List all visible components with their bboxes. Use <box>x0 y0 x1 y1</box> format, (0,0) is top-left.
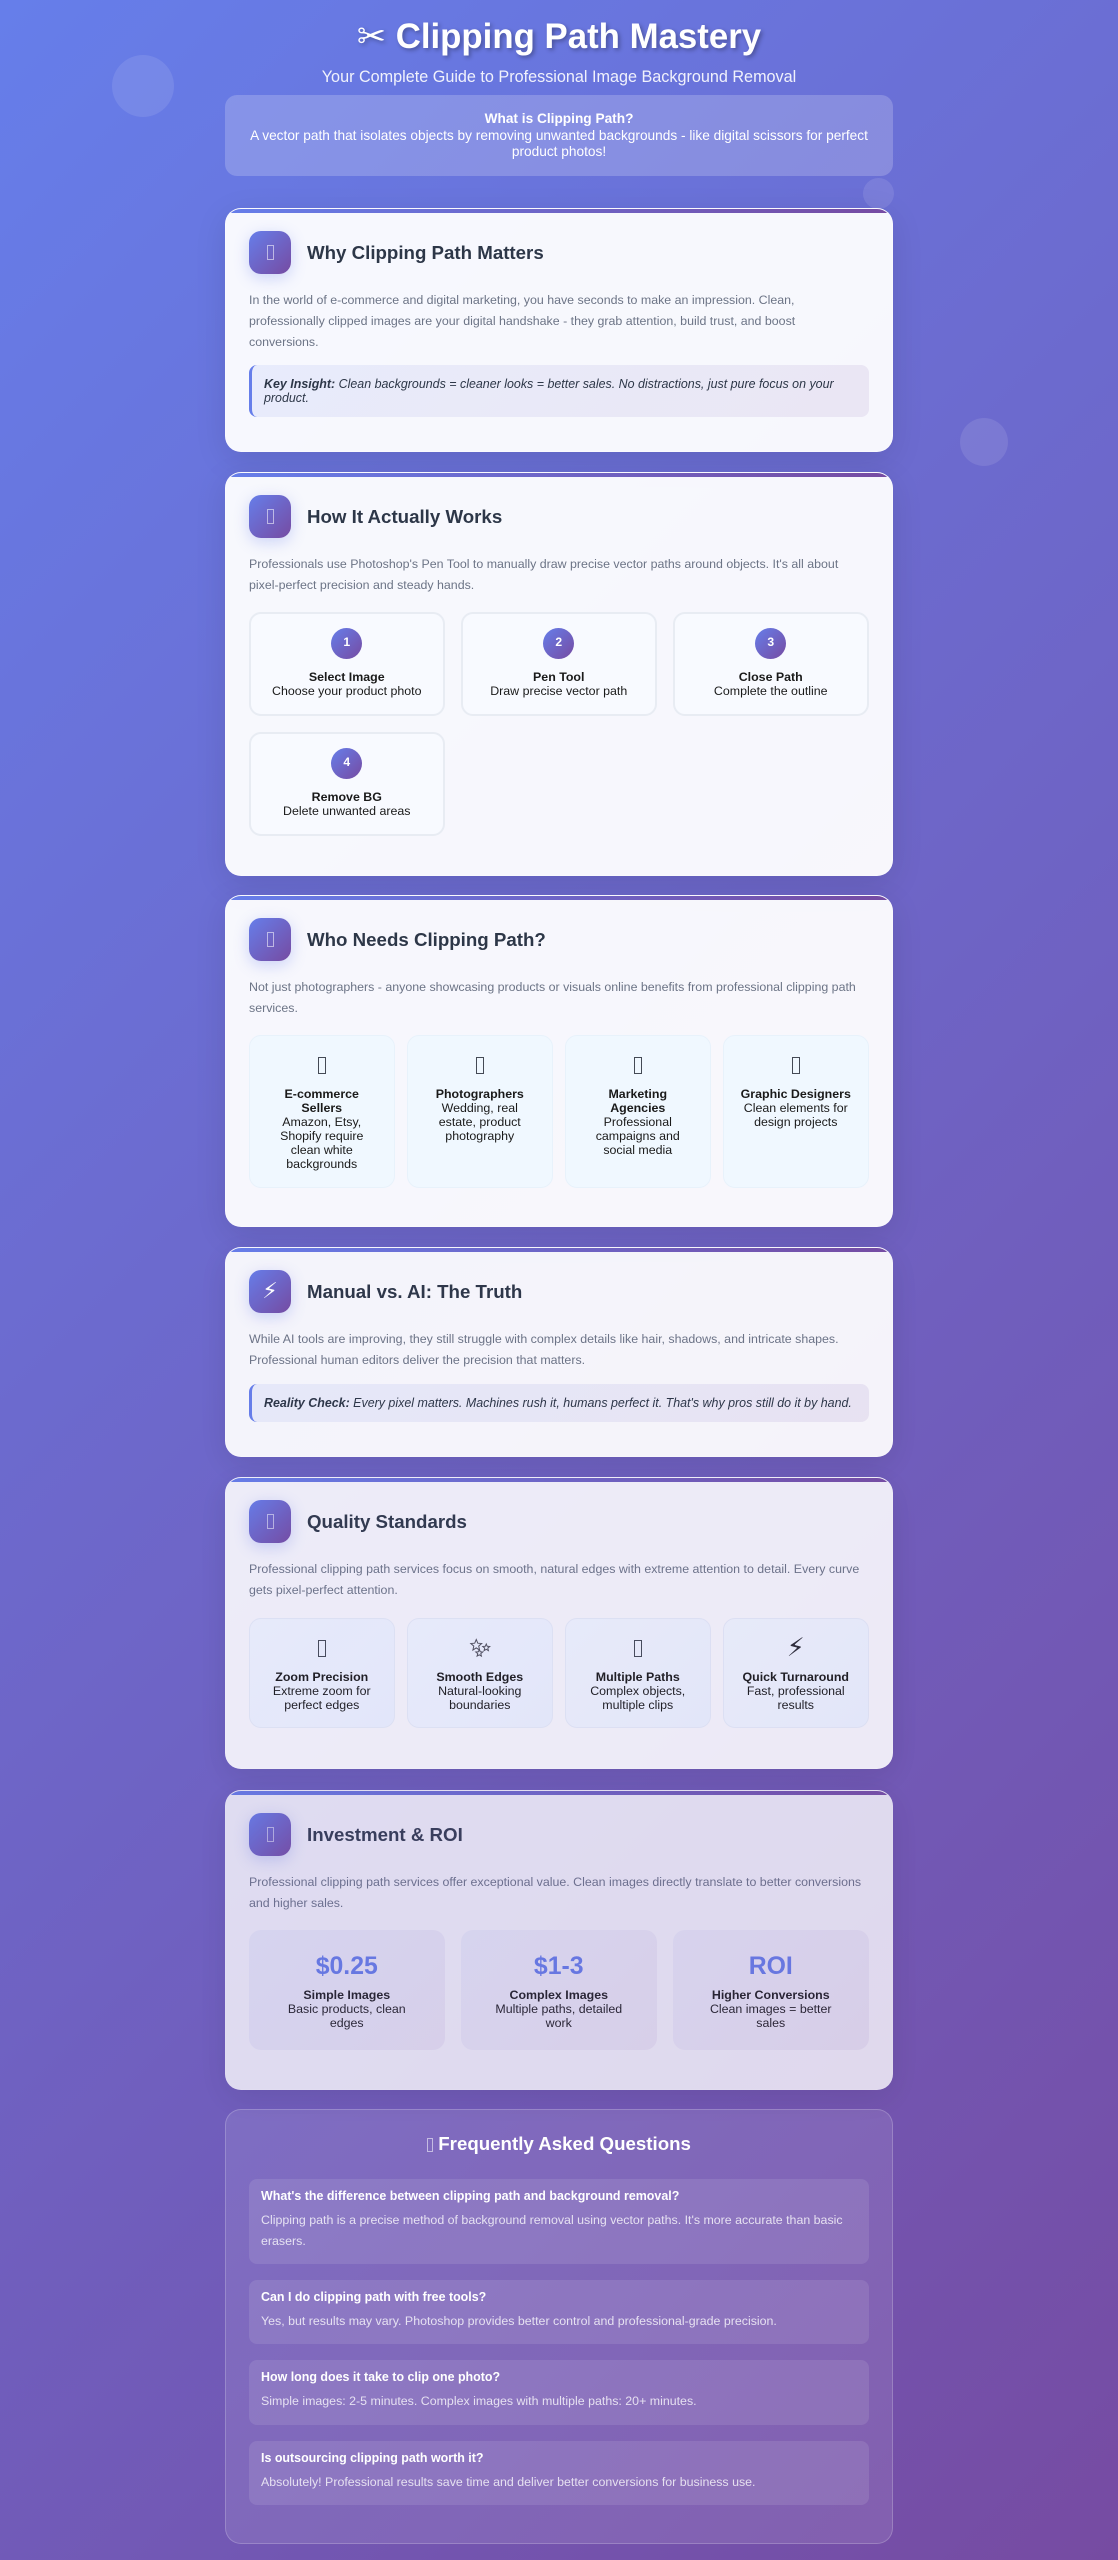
faq item 2: Yes, but results may vary. Photoshop provides better control and professional-grade precision. <box>261 2314 777 2328</box>
faq item 2: Can I do clipping path with free tools? <box>261 2290 486 2304</box>
price: simple images <box>249 1930 444 2050</box>
text: how it works: Professionals use Photoshop's Pen Tool to manually draw precise vector paths around objects. It's all about pixel-perfect precision and steady hands. <box>249 557 838 592</box>
feature: multiple paths: Complex objects, multiple clips <box>590 1684 685 1712</box>
callout: key insight <box>249 365 869 417</box>
panel: investment and roi <box>225 1790 893 2090</box>
feature: smooth edges <box>407 1618 552 1728</box>
audience: graphic designers: Clean elements for design projects <box>744 1101 848 1129</box>
feature: quick turnaround: ⚡ <box>787 1633 805 1663</box>
icon: missing glyph box <box>249 918 291 961</box>
text: quality standards: Professional clipping path services focus on smooth, natural edges with extreme attention to detail. Every curve gets pixel-perfect attention. <box>249 1562 859 1597</box>
feature: zoom precision: Extreme zoom for perfect edges <box>273 1684 371 1712</box>
decorative circle: right <box>960 418 1008 466</box>
stat: roi: ROI <box>749 1953 793 1980</box>
feature: zoom precision: Zoom Precision <box>275 1670 368 1684</box>
stat: roi <box>673 1930 868 2050</box>
subtitle: Your Complete Guide to Professional Image Background Removal <box>322 68 796 86</box>
audience: e-commerce sellers: E-commerce Sellers <box>285 1087 359 1115</box>
faq item 3 <box>249 2360 869 2425</box>
faq item 1: What's the difference between clipping path and background removal? <box>261 2189 679 2203</box>
audience: e-commerce sellers <box>249 1035 394 1188</box>
faq item 4 <box>249 2441 869 2505</box>
feature: smooth edges: Smooth Edges <box>436 1670 523 1684</box>
step 2: Pen Tool <box>533 670 584 684</box>
faq item 3: Simple images: 2-5 minutes. Complex images with multiple paths: 20+ minutes. <box>261 2394 697 2408</box>
intro callout: what is clipping path: What is Clipping Path? <box>485 111 633 126</box>
audience: marketing agencies: Marketing Agencies <box>608 1087 667 1115</box>
price: complex images: Multiple paths, detailed work <box>495 2002 622 2030</box>
icon: missing glyph box <box>249 1500 291 1543</box>
step 3 <box>673 612 868 716</box>
step 2: Draw precise vector path <box>490 684 627 698</box>
audience: photographers: Photographers <box>436 1087 524 1101</box>
intro callout: what is clipping path <box>225 95 893 176</box>
audience: photographers: Wedding, real estate, product photography <box>439 1101 521 1143</box>
text: why it matters: conversions. <box>249 335 319 349</box>
price: simple images: Basic products, clean edges <box>288 2002 406 2030</box>
step 3: Complete the outline <box>714 684 828 698</box>
faq item 2 <box>249 2280 869 2344</box>
faq item 4: Is outsourcing clipping path worth it? <box>261 2451 483 2465</box>
icon: missing glyph box <box>249 231 291 274</box>
icon: missing glyph box <box>249 1813 291 1856</box>
feature: multiple paths <box>565 1618 710 1728</box>
step 1 <box>249 612 444 716</box>
panel: who needs clipping path <box>225 895 893 1227</box>
text: manual vs ai: While AI tools are improving, they still struggle with complex details like hair, shadows, and intricate shapes. Professional human editors deliver the precision that matters. <box>249 1332 839 1367</box>
text: why it matters: professionally clipped images are your digital handshake - they grab attention, build trust, and boost <box>249 314 795 328</box>
step 4: 4 <box>343 755 350 769</box>
faq item 1 <box>249 2179 869 2264</box>
stat: roi: Higher Conversions <box>712 1988 830 2002</box>
price: complex images: Complex Images <box>510 1988 608 2002</box>
heading: investment: Investment & ROI <box>307 1824 463 1845</box>
step 4 <box>249 732 444 836</box>
decorative circle: upper left <box>112 55 174 117</box>
step 1: 1 <box>343 635 350 649</box>
feature: quick turnaround: Fast, professional results <box>747 1684 845 1712</box>
panel: faq <box>225 2109 893 2544</box>
step 4: Remove BG <box>312 790 382 804</box>
icon: missing glyph box <box>249 495 291 538</box>
faq item 3: How long does it take to clip one photo? <box>261 2370 500 2384</box>
text: who needs it: Not just photographers - anyone showcasing products or visuals online benefits from professional clipping path services. <box>249 980 856 1015</box>
heading: who needs it: Who Needs Clipping Path? <box>307 929 546 950</box>
step 2: 2 <box>555 635 562 649</box>
feature: quick turnaround: Quick Turnaround <box>742 1670 849 1684</box>
decorative circle: small upper right <box>863 178 894 209</box>
audience: graphic designers: Graphic Designers <box>741 1087 851 1101</box>
title: ✂ Clipping Path Mastery <box>357 17 761 57</box>
step 2 <box>461 612 656 716</box>
callout: key insight: Key Insight: Clean backgrounds = cleaner looks = better sales. No distractions, just pure focus on your product. <box>264 377 834 405</box>
panel: quality standards <box>225 1477 893 1769</box>
price: simple images: $0.25 <box>316 1953 378 1980</box>
step 1: Select Image <box>309 670 385 684</box>
icon: lightning <box>249 1270 291 1313</box>
stat: roi: Clean images = better sales <box>710 2002 832 2030</box>
heading: how it works: How It Actually Works <box>307 506 502 527</box>
feature: zoom precision <box>249 1618 394 1728</box>
intro callout: what is clipping path: A vector path that isolates objects by removing unwanted backgrounds - like digital scissors for perfect product photos! <box>250 128 868 159</box>
price: complex images: $1-3 <box>534 1953 584 1980</box>
feature: quick turnaround <box>723 1618 868 1728</box>
faq item 4: Absolutely! Professional results save time and deliver better conversions for business use. <box>261 2475 756 2489</box>
faq item 1: Clipping path is a precise method of background removal using vector paths. It's more accurate than basic erasers. <box>261 2213 843 2248</box>
callout: reality check <box>249 1384 869 1422</box>
audience: graphic designers <box>723 1035 868 1188</box>
price: complex images <box>461 1930 656 2050</box>
feature: multiple paths: Multiple Paths <box>596 1670 680 1684</box>
heading: manual vs ai: Manual vs. AI: The Truth <box>307 1281 522 1302</box>
price: simple images: Simple Images <box>303 1988 390 2002</box>
feature: smooth edges: Natural-looking boundaries <box>438 1684 521 1712</box>
heading: faq: Frequently Asked Questions <box>438 2133 691 2154</box>
panel: why clipping path matters <box>225 208 893 452</box>
callout: reality check: Reality Check: Every pixel matters. Machines rush it, humans perfect it. That's why pros still do it by hand. <box>264 1396 852 1410</box>
icon: lightning: ⚡ <box>262 1279 278 1304</box>
step 3: 3 <box>767 635 774 649</box>
heading: why it matters: Why Clipping Path Matters <box>307 242 544 263</box>
step 4: Delete unwanted areas <box>283 804 410 818</box>
panel: manual vs ai <box>225 1247 893 1457</box>
audience: marketing agencies <box>565 1035 710 1188</box>
text: investment: Professional clipping path services offer exceptional value. Clean images directly translate to better conversions and higher sales. <box>249 1875 861 1910</box>
heading: quality standards: Quality Standards <box>307 1511 467 1532</box>
step 1: Choose your product photo <box>272 684 421 698</box>
text: why it matters: In the world of e-commerce and digital marketing, you have seconds to make an impression. Clean, <box>249 293 794 307</box>
text: why it matters <box>249 293 796 349</box>
audience: photographers <box>407 1035 552 1188</box>
step 3: Close Path <box>739 670 803 684</box>
panel: how it works <box>225 472 893 876</box>
audience: marketing agencies: Professional campaigns and social media <box>596 1115 680 1157</box>
audience: e-commerce sellers: Amazon, Etsy, Shopify require clean white backgrounds <box>280 1115 363 1171</box>
